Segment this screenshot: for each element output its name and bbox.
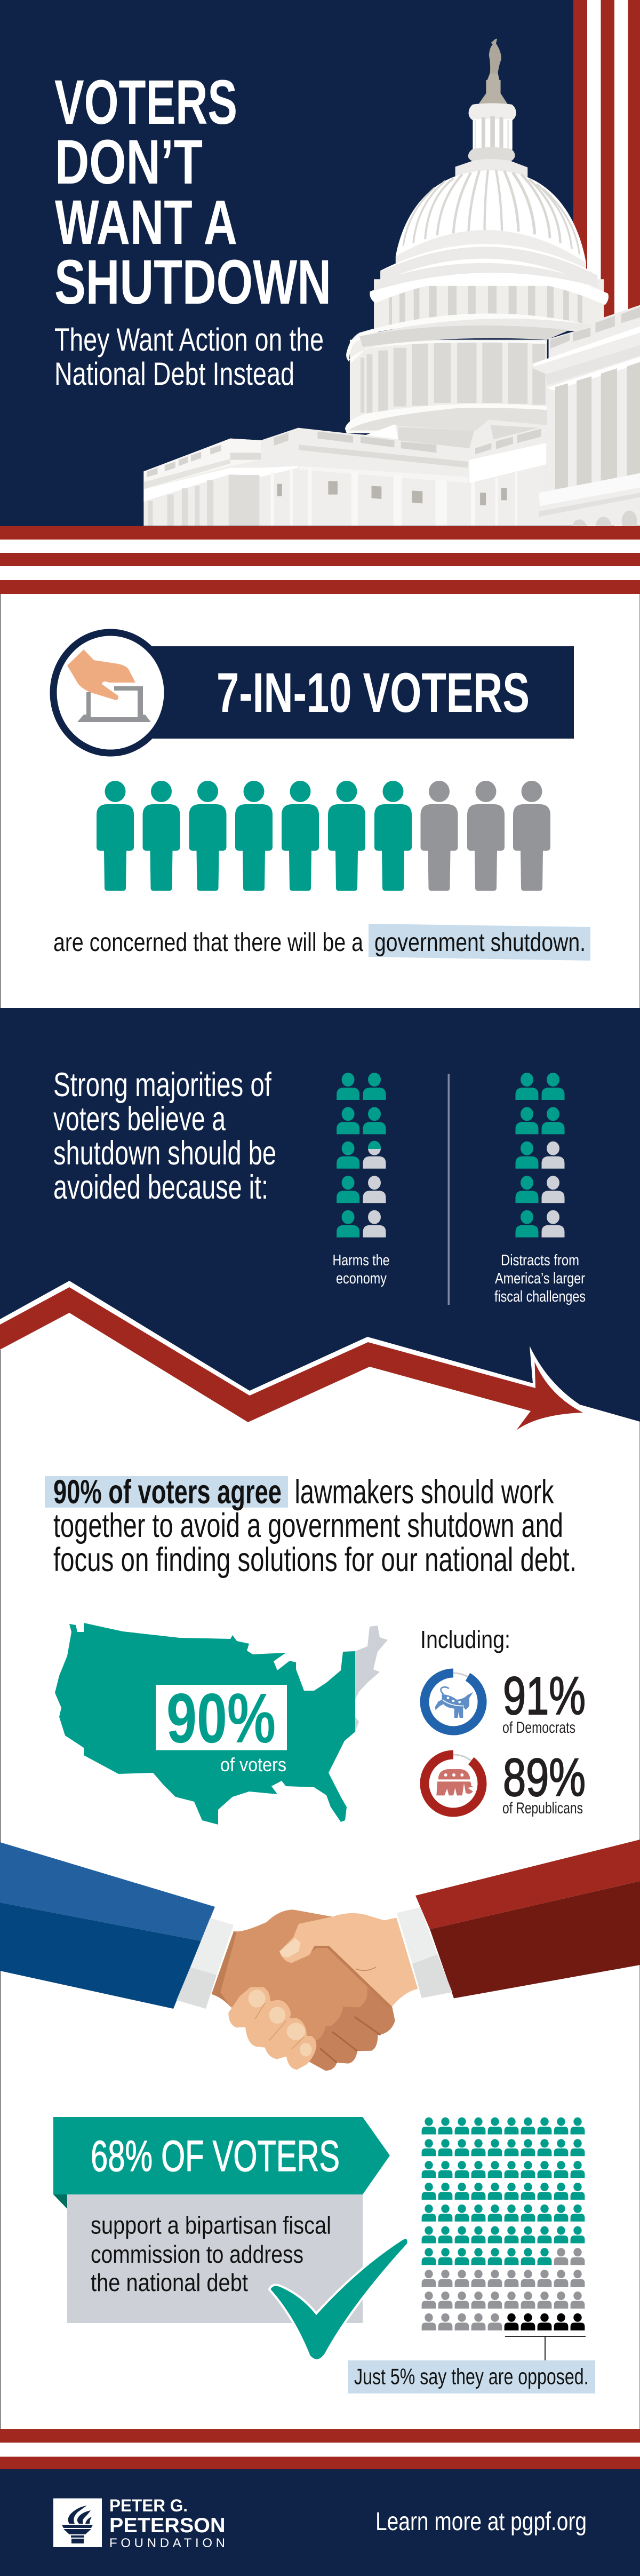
highlight: government shutdown: [369, 924, 590, 961]
label: of voters: of voters: [220, 1754, 286, 1776]
text: 90% statement: [53, 1473, 577, 1579]
title: WANT A: [55, 187, 237, 258]
text box: bipartisan fiscal commission: support a bipartisan fiscal: [91, 2212, 331, 2239]
stat: 89% of Republicans: 89%: [503, 1748, 586, 1808]
text: 90% statement: 90% of voters agree: [53, 1473, 282, 1511]
title: SHUTDOWN: [54, 247, 331, 318]
text: concerned statement: government shutdown.: [374, 929, 586, 957]
text: concerned statement: are concerned that there will be a: [53, 929, 363, 957]
banner: 68% of voters: [53, 2117, 390, 2209]
icon: donkey: [435, 1687, 473, 1718]
label: distracts from fiscal challenges: America’s larger: [495, 1270, 585, 1287]
text: foundation name: FOUNDATION: [109, 2536, 225, 2550]
panel: 7-in-10 voters: [0, 594, 640, 1008]
illustration: Capitol dome: [370, 38, 609, 329]
panel: strong majorities: [0, 1008, 640, 1435]
pictogram: harms the economy: [337, 1073, 386, 1238]
label: distracts from fiscal challenges: fiscal challenges: [494, 1288, 586, 1305]
banner: 68% of voters: 68% OF VOTERS: [91, 2132, 340, 2181]
text: strong majorities: [53, 1066, 276, 1206]
illustration: Capitol lower drum and wings: [143, 305, 640, 535]
panel: footer: [0, 2469, 640, 2576]
pictogram: 7 of 10 people: [97, 781, 550, 891]
heading: including: Including:: [420, 1626, 510, 1653]
subtitle: [54, 322, 324, 392]
text: strong majorities: shutdown should be: [53, 1135, 276, 1172]
title: [54, 67, 331, 318]
stat: 89% of Republicans: of Republicans: [502, 1800, 583, 1817]
map: United States 90 percent: [55, 1623, 388, 1825]
callout: just 5%: [348, 2360, 595, 2393]
illustration: handshake: [0, 1840, 640, 2071]
panel: hero header: [0, 0, 640, 594]
banner: 7-in-10 voters: 7-IN-10 VOTERS: [217, 662, 530, 724]
label: harms the economy: [333, 1252, 389, 1287]
panel: white lower section background: [0, 1281, 640, 2429]
label: distracts from fiscal challenges: Distracts from: [501, 1252, 579, 1269]
label: harms the economy: economy: [336, 1270, 387, 1287]
text: strong majorities: Strong majorities of: [53, 1066, 271, 1104]
text: foundation name: PETER G.: [109, 2496, 188, 2515]
clasped hands: [212, 1909, 418, 2071]
text box: bipartisan fiscal commission: commission to address: [91, 2240, 303, 2268]
text: learn more: Learn more at pgpf.org: [375, 2508, 587, 2536]
icon: elephant: [436, 1769, 474, 1795]
arrow: falling red zigzag: [0, 1287, 583, 1430]
blue sleeve: [0, 1842, 234, 2009]
icon: torch logo: [53, 2499, 102, 2547]
icon: check mark: [269, 2238, 409, 2360]
pictogram: 100 voters: [422, 2118, 585, 2331]
text box: bipartisan fiscal commission: the national debt: [91, 2269, 248, 2296]
text: strong majorities: voters believe a: [53, 1100, 226, 1138]
stat: 91% of Democrats: of Democrats: [502, 1719, 575, 1737]
highlight: 90% of voters agree: [45, 1476, 288, 1508]
horizontal flag stripes: [0, 526, 640, 594]
right wing: [532, 305, 640, 526]
title: DON’T: [55, 127, 203, 197]
callout: 90%: 90%: [166, 1679, 276, 1757]
vertical flag stripes: [573, 0, 640, 526]
bracket: opposed: [505, 2336, 586, 2360]
text: foundation name: PETERSON: [109, 2514, 225, 2537]
pictogram: distracts from fiscal challenges: [515, 1073, 564, 1238]
stat: 89% of Republicans: [425, 1748, 586, 1817]
label: distracts from fiscal challenges: [494, 1252, 586, 1305]
left wing: [143, 420, 547, 526]
label: harms the economy: Harms the: [333, 1252, 389, 1269]
stat: 91% of Democrats: [425, 1666, 586, 1737]
stat: 91% of Democrats: 91%: [503, 1666, 586, 1726]
banner: 7-in-10 voters: [144, 646, 574, 739]
red sleeve: [397, 1840, 640, 1998]
text box: bipartisan fiscal commission: [67, 2194, 363, 2323]
subtitle: National Debt Instead: [54, 356, 294, 392]
title: VOTERS: [54, 67, 237, 138]
text: foundation name: [109, 2496, 225, 2550]
subtitle: They Want Action on the: [54, 322, 324, 358]
text: strong majorities: avoided because it:: [53, 1169, 268, 1206]
footer stripes: [0, 2429, 640, 2470]
icon: hand voting at ballot box: [53, 632, 167, 753]
text: 90% statement: lawmakers should work: [294, 1473, 554, 1511]
